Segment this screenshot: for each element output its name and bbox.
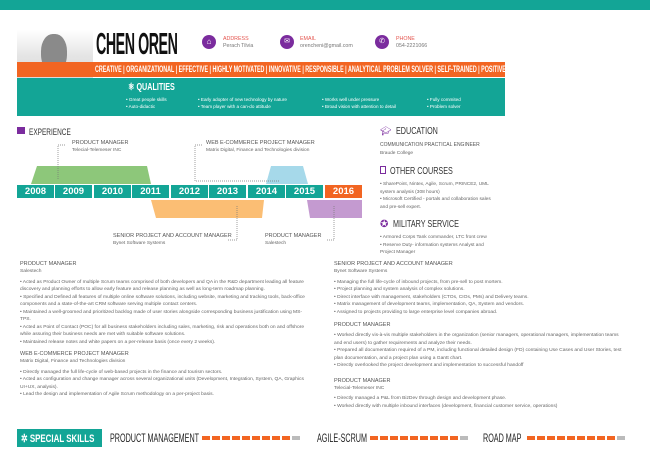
left job details: Matrix Digital, Finance and Technologies division — [20, 359, 125, 364]
military service — [380, 219, 487, 255]
top bar — [0, 0, 650, 10]
contact: address — [202, 35, 254, 49]
qualities panel: • Auto-didactic — [126, 104, 155, 108]
right job details: Telecial-Telemeser INC — [334, 386, 384, 390]
text: 2012 — [179, 186, 200, 197]
other courses: • SharePoint, Nintex, Agile, Scrum, PRINCE2, UML system analysis (308 hours) — [380, 182, 489, 194]
text: 2015 — [294, 186, 315, 197]
education — [380, 126, 480, 156]
traits bar — [17, 62, 505, 77]
text: 2016 — [333, 186, 354, 197]
text: 2014 — [256, 186, 277, 197]
military service: • Reserve Duty- information systems Analyst and Project Manager — [380, 242, 484, 255]
contact: address: ADDRESS — [223, 36, 249, 42]
right job details: Bynet Software Systems — [334, 269, 387, 274]
year cells: 2008 — [25, 186, 46, 197]
right job details: • Managing the full life-cycle of inbound projects, from pre-sell to post mortem. — [334, 280, 503, 284]
timeline shapes — [31, 144, 362, 240]
qualities panel: • Problem solver — [427, 104, 461, 108]
name: CHEN OREN — [96, 26, 177, 61]
education: 🎓︎ — [380, 126, 391, 136]
qualities heading: ⚛ QUALITIES — [128, 82, 175, 93]
text: PRODUCT MANAGER — [265, 233, 321, 239]
other courses: OTHER COURSES — [390, 166, 453, 177]
right job details: • Directly managed a P&L from BizDev through design and development phase. — [334, 396, 506, 401]
photo — [17, 30, 93, 116]
skill: road map — [483, 431, 625, 445]
text: WEB E-COMMERCE PROJECT MANAGER — [206, 140, 315, 146]
text: SENIOR PROJECT AND ACCOUNT MANAGER — [113, 233, 232, 239]
timeline labels: PRODUCT MANAGER — [72, 140, 128, 146]
text: 2013 — [217, 186, 238, 197]
traits bar: CREATIVE | ORGANIZATIONAL | EFFECTIVE | HIGHLY MOTIVATED | INNOVATIVE | RESPONSIBLE | ANALYTICAL PROBLEM SOLVER | SELF-TRAINED | POSITIVE — [95, 64, 505, 74]
left job details: • Acted as Point of Contact (POC) for all business stakeholders including sales, marketing, risk and operations both on and offshore while assuring their business needs are met with suitable software solutions. — [20, 324, 304, 337]
contact: email: ✉ — [284, 38, 290, 45]
left job details: WEB E-COMMERCE PROJECT MANAGER — [20, 351, 129, 357]
right job details: PRODUCT MANAGER — [334, 378, 390, 384]
left job details: • Acted as configuration and change manager across several organizational units (Development, Integration, System, QA, Graphics UI+UX, analysis). — [20, 377, 304, 390]
contact: phone: PHONE — [396, 36, 415, 42]
other courses — [380, 166, 491, 210]
education: COMMUNICATION PRACTICAL ENGINEER — [380, 142, 480, 148]
right job details: PRODUCT MANAGER — [334, 322, 390, 328]
text: Matrix Digital, Finance and Technologies division — [206, 148, 309, 153]
right job details: • Matrix management of development teams, implementation, QA, System and vendors. — [334, 302, 524, 307]
contact: phone: 054-2221066 — [396, 43, 427, 49]
left job details: • Maintained release notes and white papers on a per-release basis (once every 2 weeks). — [20, 340, 215, 344]
experience heading: EXPERIENCE — [29, 127, 71, 137]
contact: email — [280, 35, 353, 49]
contact: email: orencheni@gmail.com — [300, 43, 353, 49]
left job details: • Directly managed the full life-cycle of web-based projects in the finance and tourism sectors. — [20, 370, 222, 374]
left job details — [20, 261, 305, 397]
contact: address: Perach Tilvia — [223, 43, 253, 49]
military service: MILITARY SERVICE — [393, 219, 459, 230]
year cells — [17, 185, 54, 198]
right job details: • Worked directly with multiple inbound interfaces (development, financial customer service, operations) — [334, 404, 557, 408]
text: Bynet Software Systems — [113, 241, 165, 246]
left job details: • Maintained a well-groomed and prioritized backlog made of user stories alongside corresponding business justification using MS-TPS. — [20, 310, 302, 322]
right job details — [334, 261, 622, 408]
skill: agile scrum: AGILE-SCRUM — [317, 431, 367, 445]
qualities panel: • Early adopter of new technology by nature — [198, 97, 287, 102]
qualities panel: • Works well under pressure — [322, 97, 379, 102]
skill: agile scrum — [317, 431, 468, 445]
qualities panel: • Broad vision with attention to detail — [322, 104, 396, 108]
right job details: • Direct interface with management, stakeholders (CTOs, CIOs, PMs) and Delivery teams. — [334, 294, 529, 300]
qualities panel: • Team player with a can-do attitude — [198, 104, 271, 108]
education: EDUCATION — [396, 126, 438, 137]
qualities panel: • Fully commited — [427, 97, 461, 102]
other courses: • Microsoft Certified - portals and collaboration sales and pre-sell expert. — [380, 197, 491, 210]
special skills label — [17, 429, 102, 447]
military service: • Armored Corps Tank commander, LTC front crew — [380, 235, 487, 240]
left job details: • Lead the design and implementation of Agile Scrum methodology on a per-project basis. — [20, 392, 214, 397]
timeline labels: Telecial-Telemeser INC — [72, 148, 121, 153]
skill: product management: PRODUCT MANAGEMENT — [110, 431, 199, 445]
right job details: • Prepared all documentation required of a PM, including functional detailed design (FD) containing Use Cases and User Stories, test plan documentation, and a project plan using a Gantt chart. — [334, 348, 621, 360]
education: Braude College — [380, 150, 413, 156]
right job details: • Assigned to projects providing to large enterprise level companies abroad. — [334, 310, 497, 314]
left job details: PRODUCT MANAGER — [20, 261, 76, 267]
contact: phone — [375, 35, 427, 49]
contact: phone: ✆ — [379, 38, 385, 45]
right job details: • Worked directly vis-à-vis multiple stakeholders in the organization (senior managers, operational managers, implementation teams and end users) to gather requirements and analyze their needs. — [334, 333, 619, 346]
military service: ✪ — [380, 219, 388, 230]
left job details: • Acted as Product Owner of multiple Scrum teams comprised of both developers and QA in the R&D department leading all feature discovery and planning efforts to allow early feature and release planning as well as long-term roadmap planning. — [20, 280, 304, 292]
qualities panel: • Great people skills — [126, 97, 167, 102]
contact: email: EMAIL — [300, 36, 316, 42]
skill: product management — [110, 431, 300, 445]
timeline labels — [72, 140, 128, 153]
skill: road map: ROAD MAP — [483, 431, 521, 445]
special skills label: ✲ SPECIAL SKILLS — [21, 433, 94, 445]
right job details: • Directly overlooked the project development and implementation to successful handoff — [334, 363, 523, 368]
qualities panel — [17, 78, 505, 116]
text: 2010 — [102, 186, 123, 197]
text: 2011 — [140, 186, 161, 197]
right job details: • Project planning and system analysis of complex solutions. — [334, 287, 465, 292]
right job details: SENIOR PROJECT AND ACCOUNT MANAGER — [334, 261, 453, 267]
left job details: Salestech — [20, 269, 41, 274]
text: Salestech — [265, 241, 286, 246]
contact: address: ⌂ — [207, 37, 211, 46]
left job details: • Specified and Defined all features of multiple online software solutions, including website, marketing and tracking tools, back-office components and a state-of-the-art CRM software serving multiple contact centers. — [20, 294, 305, 307]
text: 2009 — [63, 186, 84, 197]
